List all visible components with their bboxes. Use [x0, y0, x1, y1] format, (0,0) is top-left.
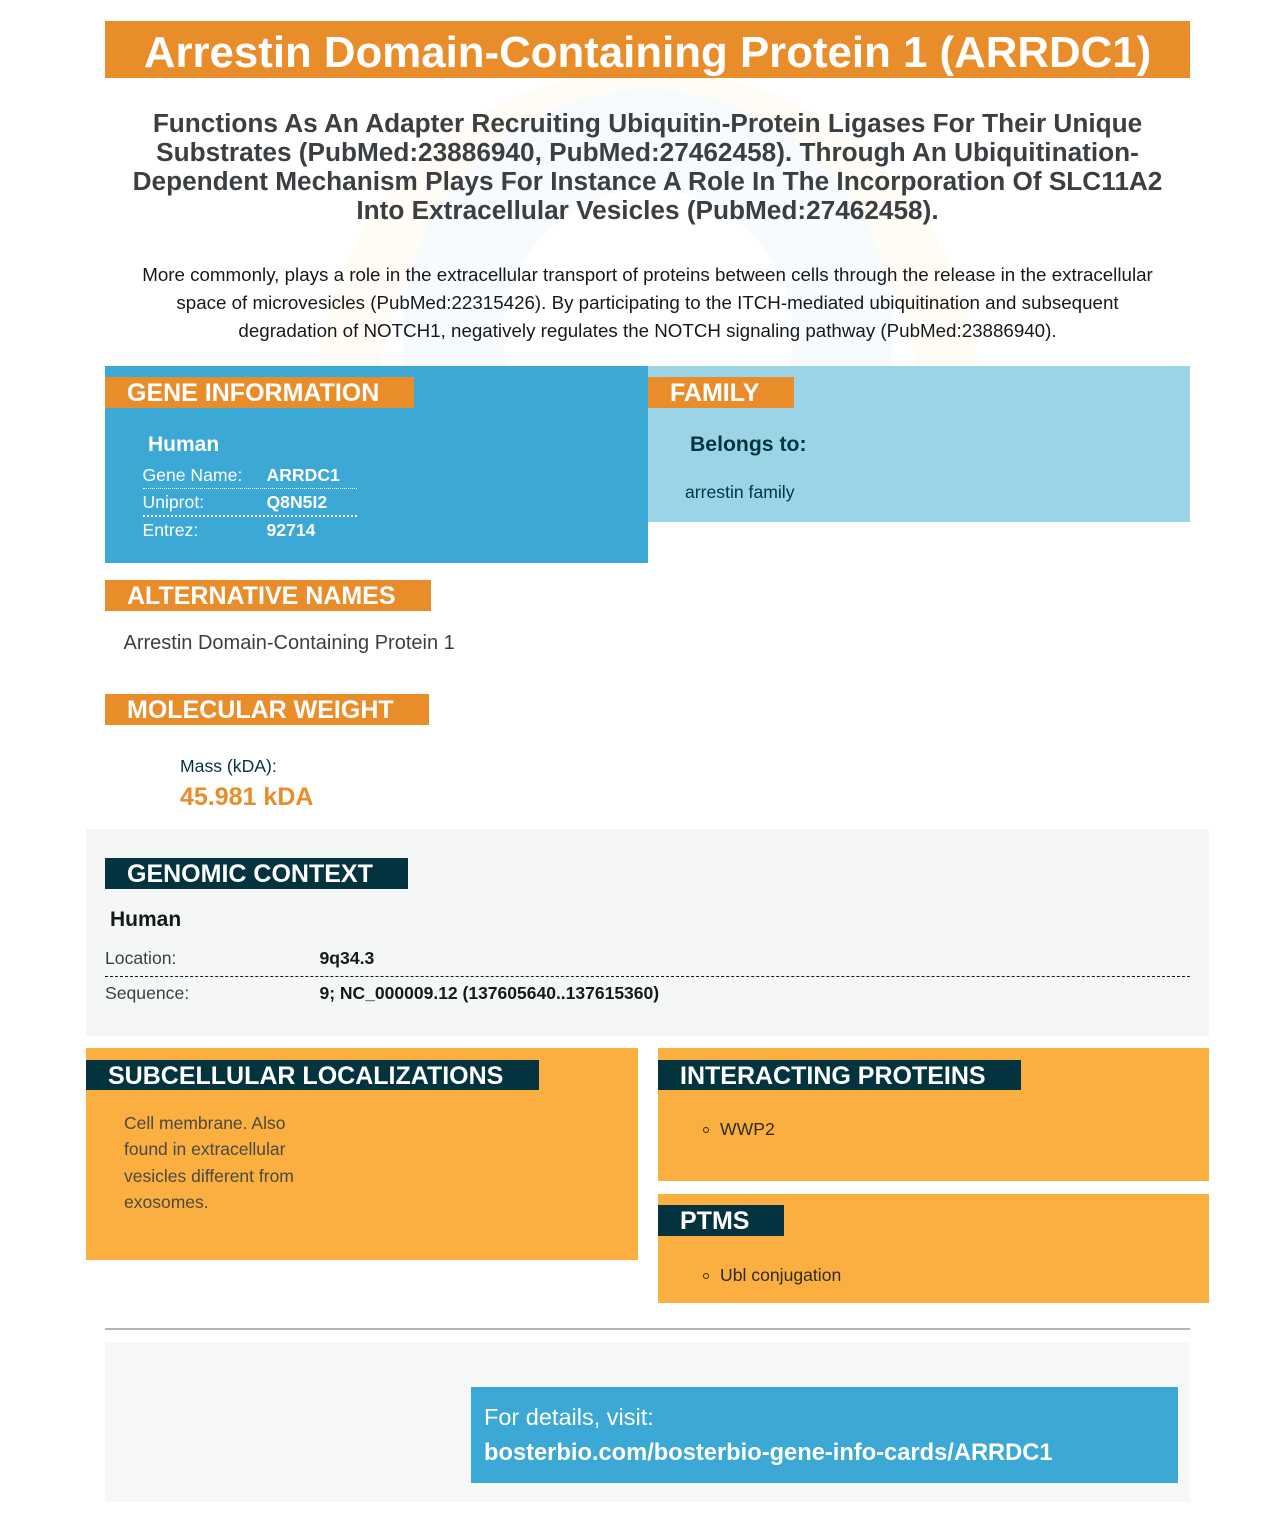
- gene name row: [142, 464, 356, 489]
- heading: gene information: GENE INFORMATION: [127, 379, 379, 407]
- heading: subcellular localizations: SUBCELLULAR LOCALIZATIONS: [108, 1062, 503, 1090]
- panel: subcellular localizations: [86, 1048, 638, 1260]
- subtitle: Substrates (PubMed:23886940, PubMed:27462458). Through An Ubiquitination-: [156, 137, 1139, 167]
- title banner: Arrestin Domain-Containing Protein 1 (ARRDC1): [144, 28, 1151, 77]
- sequence row: [105, 983, 659, 1003]
- heading: family: FAMILY: [670, 379, 759, 407]
- description: space of microvesicles (PubMed:22315426). By participating to the ITCH-mediated ubiquitination and subsequent: [176, 292, 1119, 313]
- panel: gene information: [105, 366, 648, 563]
- subtitle: [133, 108, 1162, 225]
- bullet: [703, 1273, 709, 1279]
- description: More commonly, plays a role in the extracellular transport of proteins between cells through the release in the extracellular: [142, 264, 1153, 285]
- location row: Location:: [105, 948, 176, 968]
- belongs to label: Belongs to:: [690, 433, 807, 456]
- localization text: [124, 1113, 294, 1212]
- panel: family: [648, 366, 1190, 522]
- subtitle: Functions As An Adapter Recruiting Ubiquitin-Protein Ligases For Their Unique: [153, 108, 1142, 138]
- alternative names text: Arrestin Domain-Containing Protein 1: [124, 632, 455, 654]
- heading: genomic context: GENOMIC CONTEXT: [127, 860, 373, 888]
- description: degradation of NOTCH1, negatively regulates the NOTCH signaling pathway (PubMed:23886940).: [238, 320, 1057, 341]
- entrez row: 92714: [266, 520, 315, 540]
- heading: ptms: PTMS: [680, 1207, 749, 1235]
- panel: genomic context: [86, 829, 1209, 1036]
- localization text: Cell membrane. Also: [124, 1113, 285, 1133]
- description: [142, 264, 1153, 341]
- callout label: For details, visit:: [484, 1404, 654, 1430]
- sequence row: 9; NC_000009.12 (137605640..137615360): [320, 983, 659, 1003]
- callout url: bosterbio.com/bosterbio-gene-info-cards/ARRDC1: [484, 1440, 1053, 1466]
- subtitle: Into Extracellular Vesicles (PubMed:27462458).: [356, 195, 939, 225]
- panel: interacting proteins: [658, 1048, 1209, 1181]
- sequence row: Sequence:: [105, 983, 189, 1003]
- location row: [105, 946, 1190, 977]
- mass value: 45.981 kDA: [180, 783, 313, 811]
- heading: molecular weight: MOLECULAR WEIGHT: [127, 696, 394, 724]
- family value: arrestin family: [685, 482, 794, 502]
- heading: family: [648, 377, 794, 408]
- location row: 9q34.3: [320, 948, 374, 968]
- uniprot row: [142, 491, 356, 517]
- panel: footer: [105, 1342, 1190, 1502]
- entrez row: Entrez:: [142, 520, 198, 540]
- gene name row: Gene Name:: [142, 465, 242, 485]
- species label: Human: [110, 908, 181, 931]
- localization text: exosomes.: [124, 1192, 209, 1212]
- heading: ptms: [658, 1205, 784, 1236]
- background watermark: [319, 78, 977, 366]
- localization text: found in extracellular: [124, 1139, 285, 1159]
- entrez row: [142, 520, 316, 540]
- bullet: [703, 1127, 709, 1133]
- panel: ptms: [658, 1194, 1209, 1303]
- protein list item: WWP2: [720, 1119, 775, 1139]
- heading: interacting proteins: INTERACTING PROTEINS: [680, 1062, 986, 1090]
- heading: alternative names: ALTERNATIVE NAMES: [127, 582, 396, 610]
- localization text: vesicles different from: [124, 1166, 294, 1186]
- uniprot row: Q8N5I2: [266, 492, 327, 512]
- uniprot row: Uniprot:: [142, 492, 204, 512]
- species label: Human: [148, 433, 219, 456]
- gene name row: ARRDC1: [266, 465, 340, 485]
- subtitle: Dependent Mechanism Plays For Instance A Role In The Incorporation Of SLC11A2: [133, 166, 1162, 196]
- callout: details link: [471, 1387, 1178, 1483]
- mass label: Mass (kDA):: [180, 756, 277, 776]
- ptm list item: Ubl conjugation: [720, 1265, 841, 1285]
